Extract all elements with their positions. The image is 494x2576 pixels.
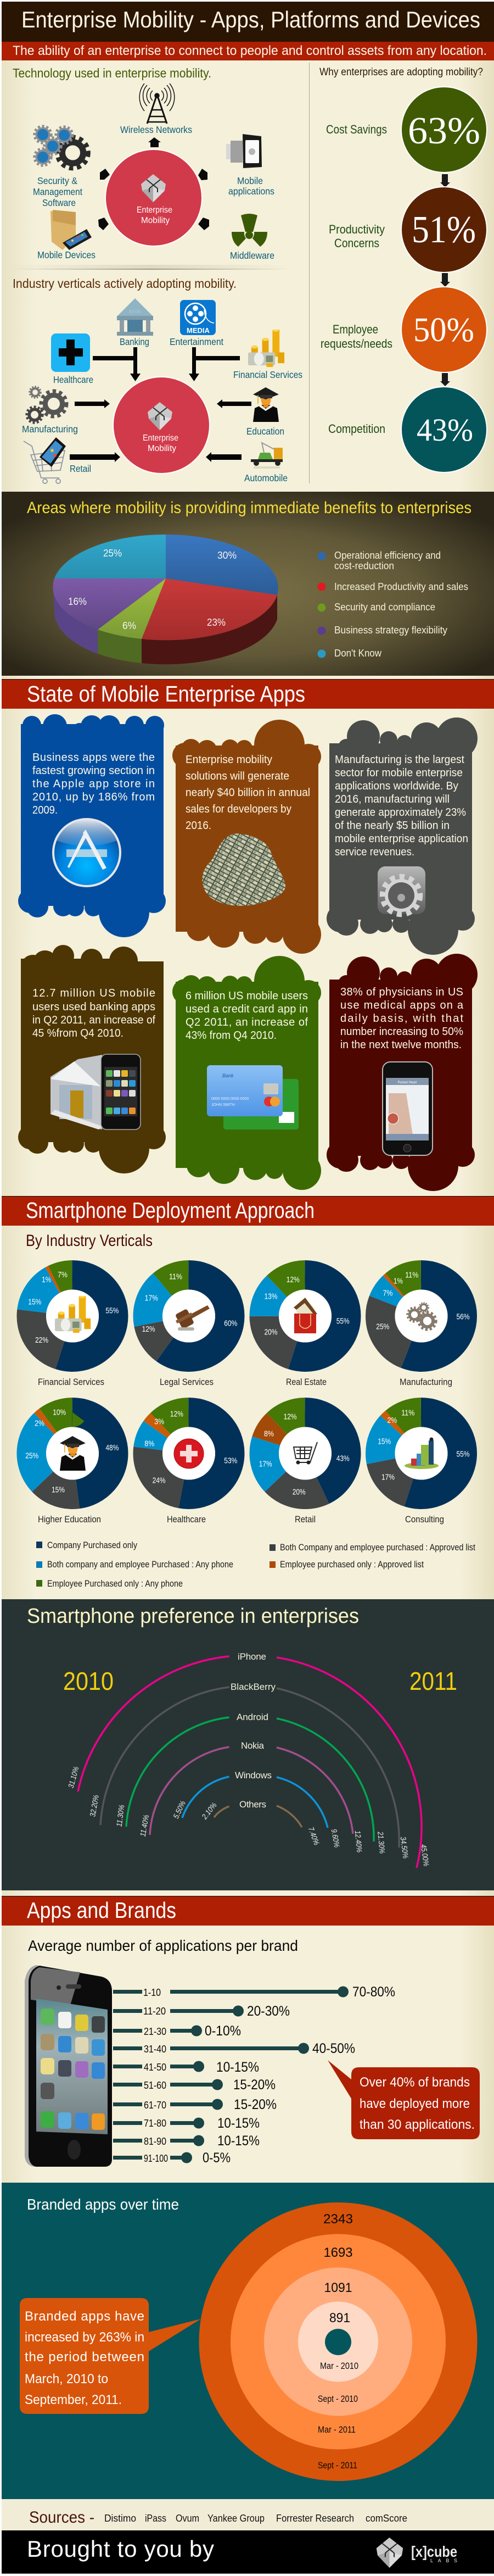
bar chart: applications per brand: 15-20% (234, 2097, 277, 2112)
labels: 2010 percentages: 11.30% (115, 1804, 126, 1827)
circle: enterprise mobility hub 2: Enterprise (143, 433, 178, 443)
labels: 2011 percentages: 21.30% (376, 1831, 387, 1854)
labels: 2010 percentages: 5.50% (171, 1799, 187, 1820)
callout: branded apps increase: March, 2010 to (25, 2372, 108, 2386)
donut: healthcare: 24% (153, 1476, 166, 1485)
icon: media (180, 300, 216, 335)
donut: retail: 17% (259, 1459, 272, 1468)
pie chart: benefits: 16% (68, 596, 87, 607)
bar chart: applications per brand: 61-70 (144, 2100, 166, 2111)
donut: financial services: 22% (35, 1336, 48, 1345)
donut: consulting: 11% (401, 1408, 414, 1417)
text: business apps: 2010, up by 186% from (32, 791, 155, 803)
callout: over 40% of brands: have deployed more (360, 2096, 470, 2111)
label: manufacturing: Manufacturing (22, 424, 78, 435)
bar chart: applications per brand (113, 1984, 395, 2166)
text: banking apps: users used banking apps (32, 1001, 155, 1013)
donut: healthcare (144, 1409, 237, 1494)
callout: branded apps increase: increased by 263% in (25, 2330, 144, 2345)
circle: enterprise mobility hub 2 (113, 377, 210, 474)
text: physicians: daily basis, with that (340, 1012, 463, 1025)
stat: cost savings: 63% (408, 110, 480, 152)
donut: manufacturing: 25% (376, 1322, 389, 1331)
labels: top row verticals: Manufacturing (400, 1377, 452, 1387)
callout: over 40% of brands (328, 2060, 480, 2139)
icon: healthcare (51, 333, 90, 372)
bar chart: applications per brand: 41-50 (144, 2062, 166, 2073)
stat: productivity concerns (329, 187, 487, 272)
donut: real estate: 13% (265, 1292, 278, 1301)
concentric chart: branded apps: Mar - 2010 (320, 2361, 358, 2371)
arrow: down (440, 273, 450, 287)
arrow: automobile to hub (206, 452, 242, 462)
stat: productivity concerns: Productivity (329, 222, 385, 236)
labels: 2011 percentages: 9.60% (330, 1828, 341, 1848)
bar chart: applications per brand: 40-50% (312, 2041, 355, 2056)
donut: higher education: 48% (105, 1443, 119, 1453)
stat: competition: 43% (417, 412, 473, 448)
icon: retail cart (24, 437, 66, 483)
concentric chart: branded apps: 2343 (323, 2212, 353, 2227)
pie chart: benefits: 30% (217, 550, 237, 561)
icon: middleware radiation (232, 214, 267, 247)
donut: healthcare: 53% (224, 1456, 237, 1465)
legend: deployment: Employee purchased only : Approved list (280, 1560, 424, 1570)
labels: platforms: Others (239, 1799, 266, 1810)
stat: employee requests (321, 287, 487, 372)
donut: retail: 12% (284, 1412, 297, 1421)
pie chart: benefits: 23% (207, 617, 226, 628)
donut: higher education: 2% (35, 1419, 44, 1428)
label: financial services: Financial Services (233, 369, 302, 380)
image: iphone (25, 1965, 112, 2167)
callout: branded apps increase (20, 2298, 201, 2414)
donut: higher education: 25% (25, 1451, 38, 1460)
labels: top row verticals: Real Estate (286, 1377, 327, 1387)
labels: platforms: BlackBerry (231, 1682, 276, 1692)
card: business apps (18, 714, 166, 937)
donut: healthcare: 3% (154, 1417, 164, 1427)
label: education: Education (246, 426, 284, 437)
bar chart: applications per brand: 71-80 (144, 2118, 166, 2129)
labels: top row verticals (38, 1377, 452, 1387)
stat: employee requests: 50% (413, 311, 474, 349)
labels: platforms: Android (237, 1712, 268, 1722)
circle: enterprise mobility hub: Enterprise (137, 205, 172, 215)
label: mobile applications: Mobile (237, 175, 263, 186)
labels: 2011 percentages: 34.50% (399, 1836, 410, 1859)
section heading: state of mobile enterprise apps: State of Mobile Enterprise Apps (27, 681, 305, 706)
arc chart: smartphone preference (78, 1656, 422, 1868)
icon: bank (117, 298, 153, 336)
icon: education (253, 387, 279, 422)
icon: media: MEDIA (187, 326, 210, 335)
labels: platforms: Windows (235, 1770, 272, 1781)
text: manufacturing sector: sector for mobile enterprise (335, 767, 463, 779)
bar chart: applications per brand: 10-15% (216, 2060, 259, 2075)
panel: benefits (2, 492, 494, 676)
donut: manufacturing: 11% (405, 1270, 418, 1279)
donut: real estate: 12% (287, 1275, 300, 1284)
donut: retail: 20% (293, 1488, 306, 1497)
donut: financial services: 55% (105, 1306, 119, 1316)
stat: employee requests: requests/needs (321, 337, 392, 350)
panel: smartphone preference (2, 1599, 494, 1890)
stat: competition: Competition (328, 422, 385, 436)
card: enterprise mobility solutions (172, 720, 321, 954)
circle: enterprise mobility hub 2: Mobility (148, 444, 176, 453)
label: security management software: Software (42, 197, 76, 208)
labels: 2010 percentages (66, 1766, 218, 1837)
donut: healthcare: 12% (170, 1409, 183, 1418)
section heading: apps and brands: Apps and Brands (27, 1898, 176, 1923)
text: business apps: the Apple app store in (32, 778, 155, 790)
icon: credit cards: JOHN SMITH (211, 1103, 235, 1107)
label: mobile applications (228, 175, 274, 197)
stat: competition (328, 387, 487, 472)
labels: bottom row verticals: Higher Education (38, 1514, 101, 1525)
donut: retail: 43% (336, 1454, 350, 1463)
donut: financial services (28, 1270, 119, 1357)
labels: platforms: iPhone (238, 1651, 266, 1662)
label: mobile applications: applications (228, 186, 274, 197)
callout: branded apps increase: Branded apps have (25, 2309, 144, 2324)
text: credit card apps: used a credit card app in (186, 1003, 308, 1015)
icon: wireless tower (139, 84, 175, 124)
bar chart: applications per brand: 51-60 (144, 2080, 166, 2091)
bar chart: applications per brand: 1-10 (143, 1987, 161, 1998)
icon: credit cards: 0000 0000 0000 0000 (211, 1097, 249, 1101)
text: enterprise solutions: 2016. (186, 820, 211, 832)
label: year 2011: 2011 (409, 1667, 457, 1695)
text: credit card apps: 43% from Q4 2010. (186, 1030, 277, 1042)
donut: financial services: 1% (42, 1275, 51, 1284)
text: physicians: use medical apps on a (340, 999, 464, 1011)
callout: branded apps increase: the period between (25, 2350, 144, 2364)
concentric chart: branded apps: 891 (329, 2311, 350, 2325)
donut: manufacturing: 7% (383, 1288, 393, 1298)
pie chart: benefits: 6% (122, 620, 136, 631)
labels: 2011 percentages: 45.00% (419, 1844, 431, 1867)
labels: 2011 percentages (307, 1826, 431, 1867)
heading: branded apps: Branded apps over time (27, 2196, 179, 2213)
labels: 2011 percentages: 7.40% (307, 1826, 321, 1846)
text: manufacturing sector: 2016, manufacturing will (335, 793, 450, 805)
panel: apps and brands background (2, 1890, 494, 2183)
label: banking: Banking (120, 336, 149, 347)
text: physicians: number increasing to 50% (340, 1026, 463, 1038)
bar chart: applications per brand: 91-100 (144, 2153, 168, 2164)
pie chart: benefits (53, 535, 278, 664)
sources strip: Yankee Group (207, 2513, 265, 2524)
section heading: state of mobile enterprise apps (2, 679, 494, 709)
icon: manufacturing gears (27, 387, 66, 422)
icon: medical phone (383, 1062, 433, 1155)
label: security management software: Management (33, 186, 82, 197)
icon: financial coins (248, 329, 284, 367)
icon: bank: BANK (129, 309, 142, 314)
bar chart: applications per brand: 20-30% (247, 2004, 290, 2019)
text: business apps: fastest growing section in (32, 765, 155, 777)
text: manufacturing sector (335, 754, 468, 858)
legend: benefits: Operational efficiency and (334, 550, 441, 561)
footer (2, 2530, 494, 2574)
text: banking apps: 45 %from Q4 2010. (32, 1027, 124, 1039)
donut: real estate (264, 1275, 350, 1357)
sources strip (2, 2499, 494, 2530)
donut: real estate: 55% (336, 1316, 350, 1326)
pie chart: benefits: 25% (103, 548, 122, 559)
footer: [x]cube (411, 2543, 457, 2560)
arrow: down (440, 174, 450, 187)
labels: top row verticals: Financial Services (38, 1377, 104, 1387)
concentric chart: branded apps: Mar - 2011 (318, 2424, 356, 2435)
footer: Brought to you by (27, 2536, 214, 2562)
labels: top row verticals: Legal Services (160, 1377, 214, 1387)
arrow: banking and healthcare to hub (93, 347, 141, 381)
card: physicians medical apps (327, 954, 478, 1191)
donut: legal services: 60% (224, 1318, 237, 1328)
text: enterprise solutions (186, 754, 310, 832)
text: business apps: Business apps were the (32, 752, 155, 764)
heading: technology used: Technology used in enterprise mobility. (13, 66, 211, 80)
text: manufacturing sector: Manufacturing is the largest (335, 754, 464, 766)
donut: healthcare: 8% (144, 1439, 154, 1448)
callout: branded apps increase: September, 2011. (25, 2393, 122, 2407)
bar chart: applications per brand: 31-40 (144, 2044, 166, 2055)
card: banking apps (18, 945, 166, 1173)
donut: real estate: 20% (265, 1327, 278, 1337)
sources strip: iPass (145, 2513, 166, 2524)
text: enterprise solutions: sales for developers by (186, 803, 291, 815)
icon: automobile truck (251, 443, 283, 469)
subtitle bar: The ability of an enterprise to connect to people and control assets from any location. (13, 43, 487, 58)
labels: platforms (231, 1651, 276, 1810)
card: credit card apps (172, 956, 321, 1190)
text: physicians: in the next twelve months. (340, 1039, 462, 1051)
donut: financial services: 15% (28, 1297, 41, 1306)
donut: retail: 8% (264, 1429, 274, 1438)
bar chart: applications per brand: 15-20% (233, 2077, 276, 2093)
label: year 2010: 2010 (63, 1667, 114, 1695)
legend: deployment: Employee Purchased only : Any phone (47, 1579, 183, 1589)
text: manufacturing sector: service revenues. (335, 846, 414, 858)
concentric chart: branded apps: Sept - 2011 (318, 2460, 357, 2471)
labels: bottom row verticals: Retail (295, 1514, 316, 1525)
donut: manufacturing: 1% (394, 1277, 403, 1286)
card: manufacturing sector (327, 717, 478, 955)
text: banking apps: 12.7 million US mobile (32, 987, 155, 999)
sources strip: Forrester Research (276, 2513, 354, 2524)
text: banking apps: in Q2 2011, an increase of (32, 1014, 155, 1026)
donut: higher education: 15% (52, 1485, 65, 1495)
labels: 2010 percentages: 31.10% (66, 1766, 81, 1789)
labels: bottom row verticals: Consulting (405, 1514, 444, 1525)
label: healthcare: Healthcare (53, 374, 93, 385)
donut: retail (259, 1412, 350, 1497)
circle: enterprise mobility hub: Mobility (141, 216, 170, 225)
legend: benefits: Don't Know (334, 648, 382, 659)
icon: settings (378, 866, 425, 914)
stat: employee requests: Employee (333, 322, 378, 336)
text: enterprise solutions: nearly $40 billion in annual (186, 787, 310, 799)
text: manufacturing sector: mobile enterprise application (335, 833, 468, 845)
labels: 2010 percentages: 11.40% (138, 1814, 150, 1837)
donut: consulting (378, 1408, 470, 1494)
text: credit card apps (186, 990, 308, 1042)
icon: mobile applications (226, 134, 262, 168)
text: manufacturing sector: generate approximately 23% (335, 806, 466, 819)
stat: productivity concerns: 51% (412, 209, 476, 251)
panel: technology and adoption background (2, 60, 494, 492)
text: manufacturing sector: applications worldwide. By (335, 780, 458, 792)
stat: cost savings: Cost Savings (326, 123, 387, 136)
concentric chart: branded apps: Sept - 2010 (318, 2394, 358, 2404)
bar chart: applications per brand: 10-15% (217, 2133, 260, 2149)
labels: 2010 percentages: 32.20% (88, 1794, 100, 1817)
text: business apps (32, 752, 155, 816)
donut: manufacturing (376, 1270, 470, 1357)
bar chart: applications per brand: 0-10% (205, 2023, 241, 2039)
bar chart: applications per brand: 81-90 (144, 2136, 166, 2147)
legend: benefits (317, 550, 468, 659)
text: enterprise solutions: solutions will generate (186, 770, 289, 782)
legend: deployment: Company Purchased only (47, 1540, 138, 1550)
sources strip: comScore (366, 2513, 407, 2524)
label: retail: Retail (70, 463, 91, 474)
section heading: apps and brands (2, 1896, 494, 1926)
legend: benefits: Business strategy flexibility (334, 625, 447, 636)
label: security management software: Security & (37, 175, 77, 186)
title bar (2, 2, 494, 42)
heading: industry verticals: Industry verticals actively adopting mobility. (13, 276, 237, 291)
callout: over 40% of brands: Over 40% of brands (360, 2075, 470, 2090)
icon: security gears (35, 126, 88, 168)
text: business apps: 2009. (32, 804, 58, 816)
section heading: smartphone deployment approach: Smartphone Deployment Approach (26, 1198, 315, 1223)
icon: credit cards (207, 1065, 299, 1130)
bar chart: applications per brand: 21-30 (144, 2026, 166, 2037)
subheading: by industry verticals: By Industry Verticals (26, 1232, 153, 1250)
sources strip: Sources - (29, 2508, 94, 2527)
labels: bottom row verticals: Healthcare (167, 1514, 206, 1525)
text: credit card apps: 6 million US mobile users (186, 990, 308, 1002)
heading: smartphone preference: Smartphone preference in enterprises (27, 1605, 359, 1628)
icon: medical phone: Pocket Heart (398, 1081, 417, 1084)
arrow: manufacturing to hub (75, 399, 110, 408)
icon: credit cards: Bank (222, 1073, 234, 1078)
donut: legal services: 12% (142, 1325, 155, 1334)
text: enterprise solutions: Enterprise mobility (186, 754, 272, 766)
callout: over 40% of brands: than 30 applications. (360, 2117, 475, 2132)
label: automobile: Automobile (244, 472, 288, 483)
arrow: up (148, 137, 161, 147)
panel: branded apps over time (2, 2183, 494, 2499)
footer: LABS (430, 2558, 457, 2563)
label: entertainment: Entertainment (170, 336, 223, 347)
circle: enterprise mobility hub (105, 149, 202, 246)
sources strip: Distimo (104, 2513, 136, 2524)
labels: bottom row verticals (38, 1514, 444, 1525)
label: mobile devices: Mobile Devices (37, 249, 96, 260)
stat: productivity concerns: Concerns (334, 236, 379, 250)
legend: deployment: Both company and employee Purchased : Any phone (47, 1560, 233, 1570)
labels: 2010 percentages: 2.10% (200, 1801, 218, 1821)
icon: app store (52, 818, 121, 887)
concentric chart: branded apps (199, 2202, 478, 2481)
donut: legal services: 11% (169, 1272, 182, 1281)
bar chart: applications per brand: 10-15% (217, 2116, 260, 2131)
label: security management software (33, 175, 82, 208)
text: banking apps (32, 987, 155, 1039)
sources strip: Ovum (176, 2513, 199, 2524)
donut: consulting: 15% (378, 1437, 391, 1446)
stat: cost savings (326, 87, 487, 173)
subheading: average applications: Average number of applications per brand (28, 1937, 298, 1954)
icon: bank and phone (50, 1054, 141, 1130)
bar chart: applications per brand: 0-5% (203, 2150, 231, 2166)
panel: state of apps background (2, 676, 494, 1197)
donut: higher education: 10% (53, 1407, 66, 1417)
panel: deployment background (2, 1226, 494, 1599)
legend: benefits: Security and compliance (334, 602, 435, 613)
donut: consulting: 2% (388, 1416, 397, 1425)
bar chart: applications per brand: 70-80% (352, 1984, 395, 2000)
arrow: down (440, 373, 450, 386)
legend: benefits: cost-reduction (334, 560, 394, 571)
legend: benefits: Increased Productivity and sales (334, 581, 468, 592)
concentric chart: branded apps: 1693 (324, 2245, 352, 2260)
section heading: smartphone deployment approach (2, 1196, 494, 1226)
legend: deployment (36, 1540, 475, 1589)
arrow: entertainment and financial to hub (189, 347, 240, 381)
donut: consulting: 55% (457, 1450, 470, 1459)
label: wireless networks: Wireless Networks (120, 124, 192, 135)
text: physicians (340, 986, 464, 1051)
bar chart: applications per brand: 11-20 (143, 2006, 166, 2017)
text: credit card apps: Q2 2011, an increase of (186, 1016, 308, 1028)
donut: manufacturing: 56% (457, 1312, 470, 1322)
label: middleware: Middleware (230, 250, 274, 261)
donut: consulting: 17% (381, 1473, 395, 1482)
labels: platforms: Nokia (241, 1740, 265, 1751)
arrow: retail to hub (70, 452, 120, 462)
text: physicians: 38% of physicians in US (340, 986, 463, 998)
text: manufacturing sector: of the nearly $5 billion in (335, 820, 450, 832)
arrow: education to hub (217, 399, 251, 408)
donut: legal services (142, 1272, 237, 1357)
icon: money pile (202, 833, 285, 906)
concentric chart: branded apps: 1091 (324, 2280, 352, 2295)
labels: 2011 percentages: 12.40% (353, 1830, 364, 1853)
donut: financial services: 7% (58, 1270, 68, 1279)
donut: legal services: 17% (145, 1293, 158, 1303)
donut: higher education (25, 1407, 119, 1495)
arrows: hub outward (98, 169, 209, 230)
icon: mobile devices folder (50, 210, 92, 250)
